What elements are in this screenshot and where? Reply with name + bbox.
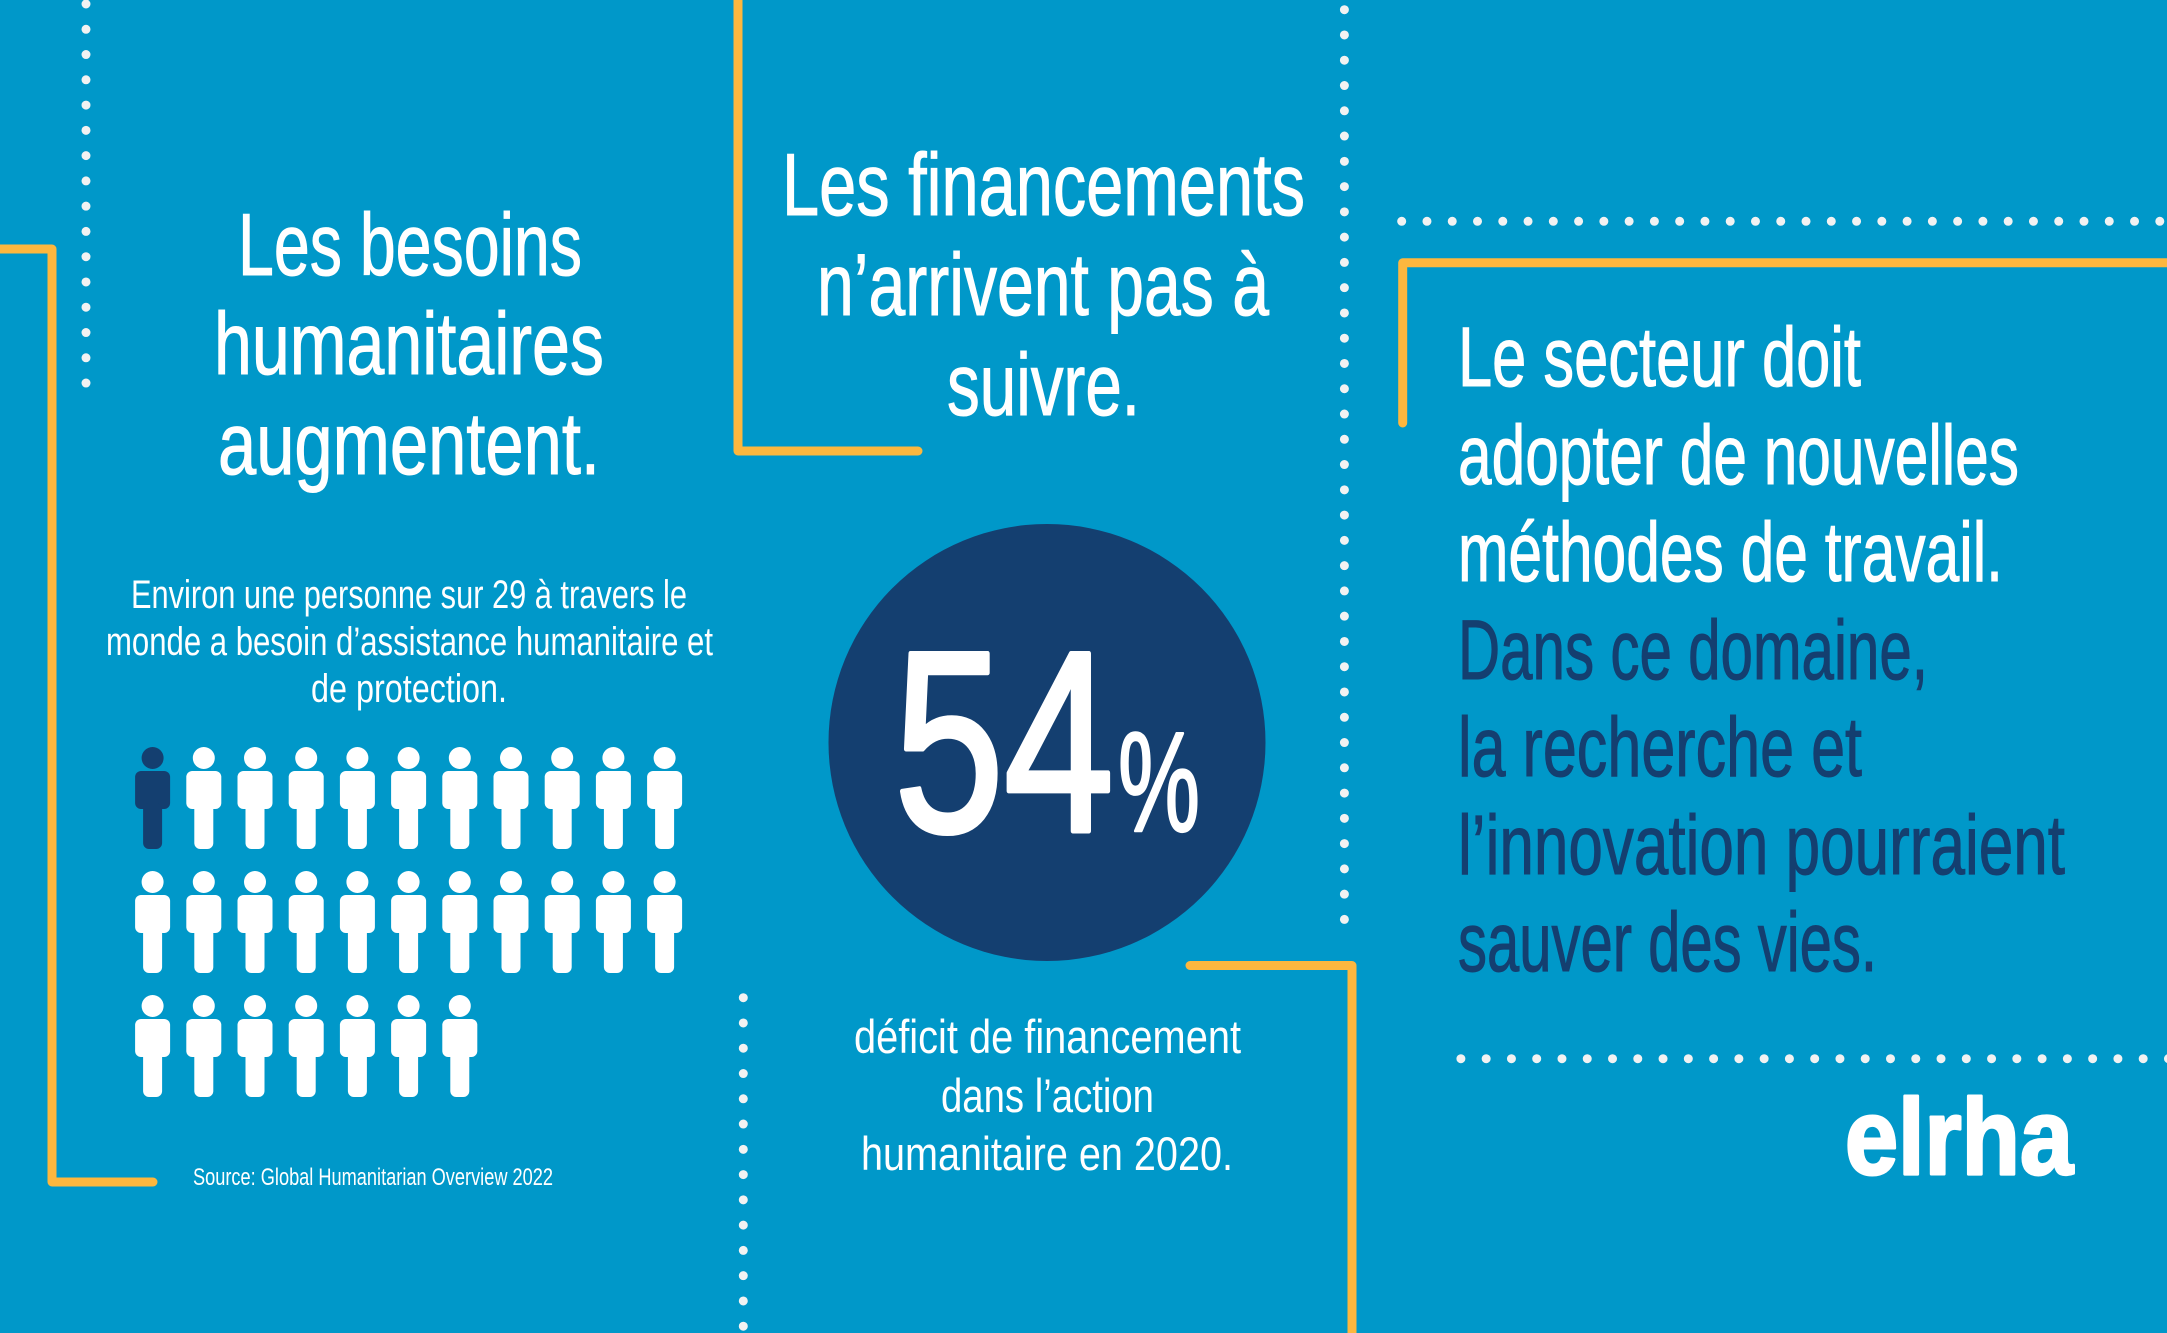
bracket: left gold line — [0, 249, 153, 1182]
heading: les financements: n’arrivent pas à — [817, 235, 1269, 334]
heading: les besoins humanitaires augmentent — [214, 195, 604, 493]
logo: elrha: elrha — [1845, 1076, 2074, 1197]
bracket: middle bottom gold line — [1190, 966, 1352, 1333]
source note: Source: Global Humanitarian Overview 2022 — [193, 1164, 553, 1191]
caption: funding deficit: déficit de financement — [854, 1010, 1241, 1063]
text block: research and innovation: sauver des vies. — [1458, 895, 1877, 989]
text block: sector must adopt new methods: Le secteur doit — [1458, 310, 1861, 404]
text block: one person in 29: monde a besoin d’assistance humanitaire et — [106, 620, 713, 664]
caption: funding deficit: humanitaire en 2020. — [861, 1127, 1233, 1180]
stat circle: 54%: % — [1118, 703, 1200, 862]
text block: research and innovation — [1458, 603, 2065, 989]
caption: funding deficit: dans l’action — [941, 1069, 1154, 1122]
text block: one person in 29: de protection. — [311, 667, 507, 711]
pictogram: 29 people, one highlighted — [135, 747, 682, 1097]
text block: sector must adopt new methods — [1458, 310, 2019, 599]
text block: one person in 29 — [106, 573, 713, 711]
heading: les besoins humanitaires augmentent: augmentent. — [218, 394, 600, 493]
text block: research and innovation: Dans ce domaine, — [1458, 603, 1928, 697]
text block: research and innovation: la recherche et — [1458, 700, 1862, 794]
heading: les financements: Les financements — [782, 135, 1305, 234]
heading: les financements — [782, 135, 1305, 434]
caption: funding deficit — [854, 1010, 1241, 1180]
heading: les besoins humanitaires augmentent: Les besoins — [238, 195, 582, 294]
heading: les financements: suivre. — [947, 335, 1140, 434]
heading: les besoins humanitaires augmentent: humanitaires — [214, 294, 604, 393]
bracket: middle top gold line — [738, 0, 918, 451]
stat circle: 54%: 54 — [894, 597, 1114, 886]
stat circle: 54% — [828, 524, 1266, 961]
text block: one person in 29: Environ une personne sur 29 à travers le — [131, 573, 687, 617]
bracket: right gold line — [1403, 263, 2167, 423]
